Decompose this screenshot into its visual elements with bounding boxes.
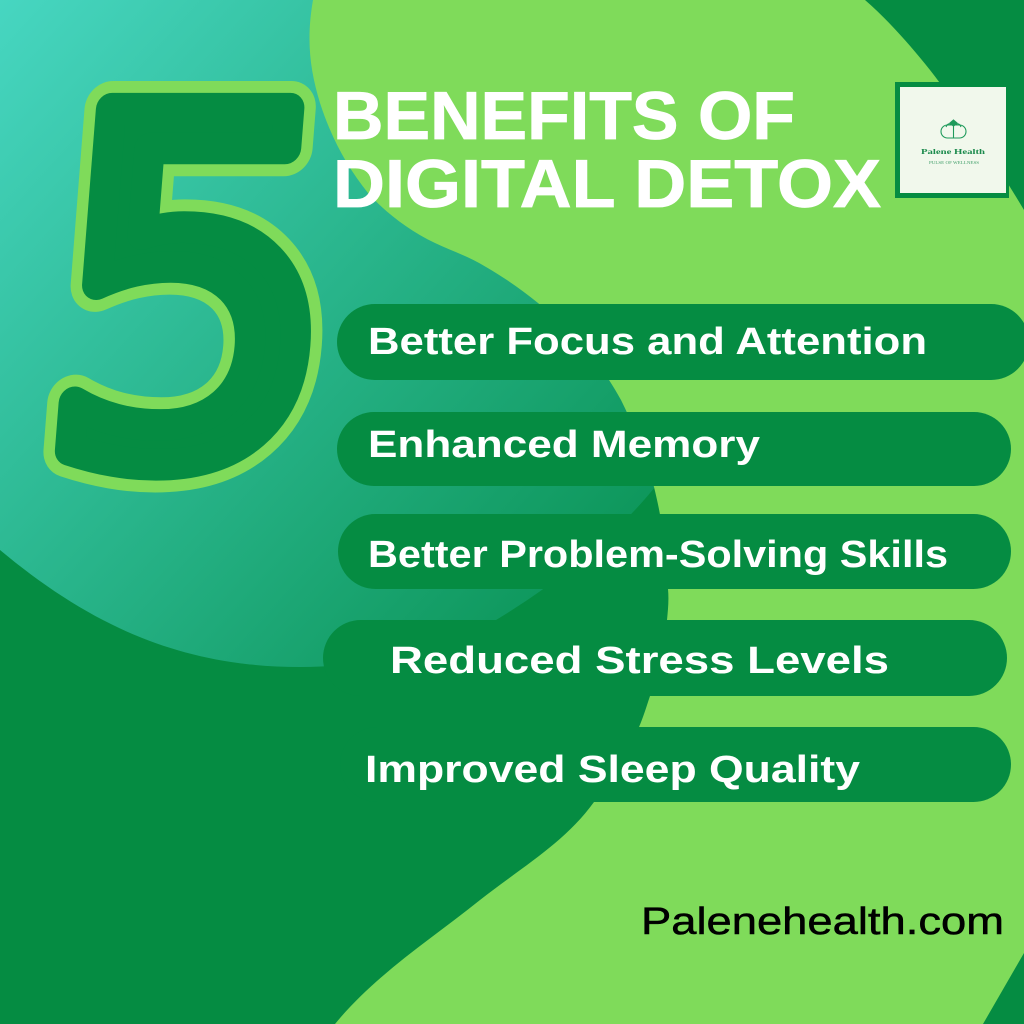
benefit 3: Better Problem-Solving Skills xyxy=(368,534,948,576)
benefit 1 xyxy=(337,304,1024,380)
logo name: Palene Health xyxy=(921,147,986,156)
title xyxy=(333,78,881,222)
benefit 3 xyxy=(338,514,1011,589)
logo badge xyxy=(895,82,1009,198)
background: teal gradient blob xyxy=(0,0,700,667)
title: BENEFITS OF xyxy=(333,78,795,154)
benefit 5 xyxy=(340,727,1011,802)
benefit 4: Reduced Stress Levels xyxy=(390,640,889,682)
benefit 4 xyxy=(323,620,1007,696)
benefit 1: Better Focus and Attention xyxy=(368,321,927,363)
benefit 2: Enhanced Memory xyxy=(368,424,760,466)
icon: leaf and pill xyxy=(941,120,966,138)
background: light green blob xyxy=(309,0,1024,1024)
title: DIGITAL DETOX xyxy=(333,146,881,222)
benefit 2 xyxy=(337,412,1011,486)
big numeral 5: 5 xyxy=(25,13,362,571)
website: Palenehealth.com xyxy=(641,901,1004,943)
benefit 5: Improved Sleep Quality xyxy=(365,749,860,791)
logo tagline: PULSE OF WELLNESS xyxy=(929,160,979,165)
big numeral 5: 5 xyxy=(25,13,362,571)
